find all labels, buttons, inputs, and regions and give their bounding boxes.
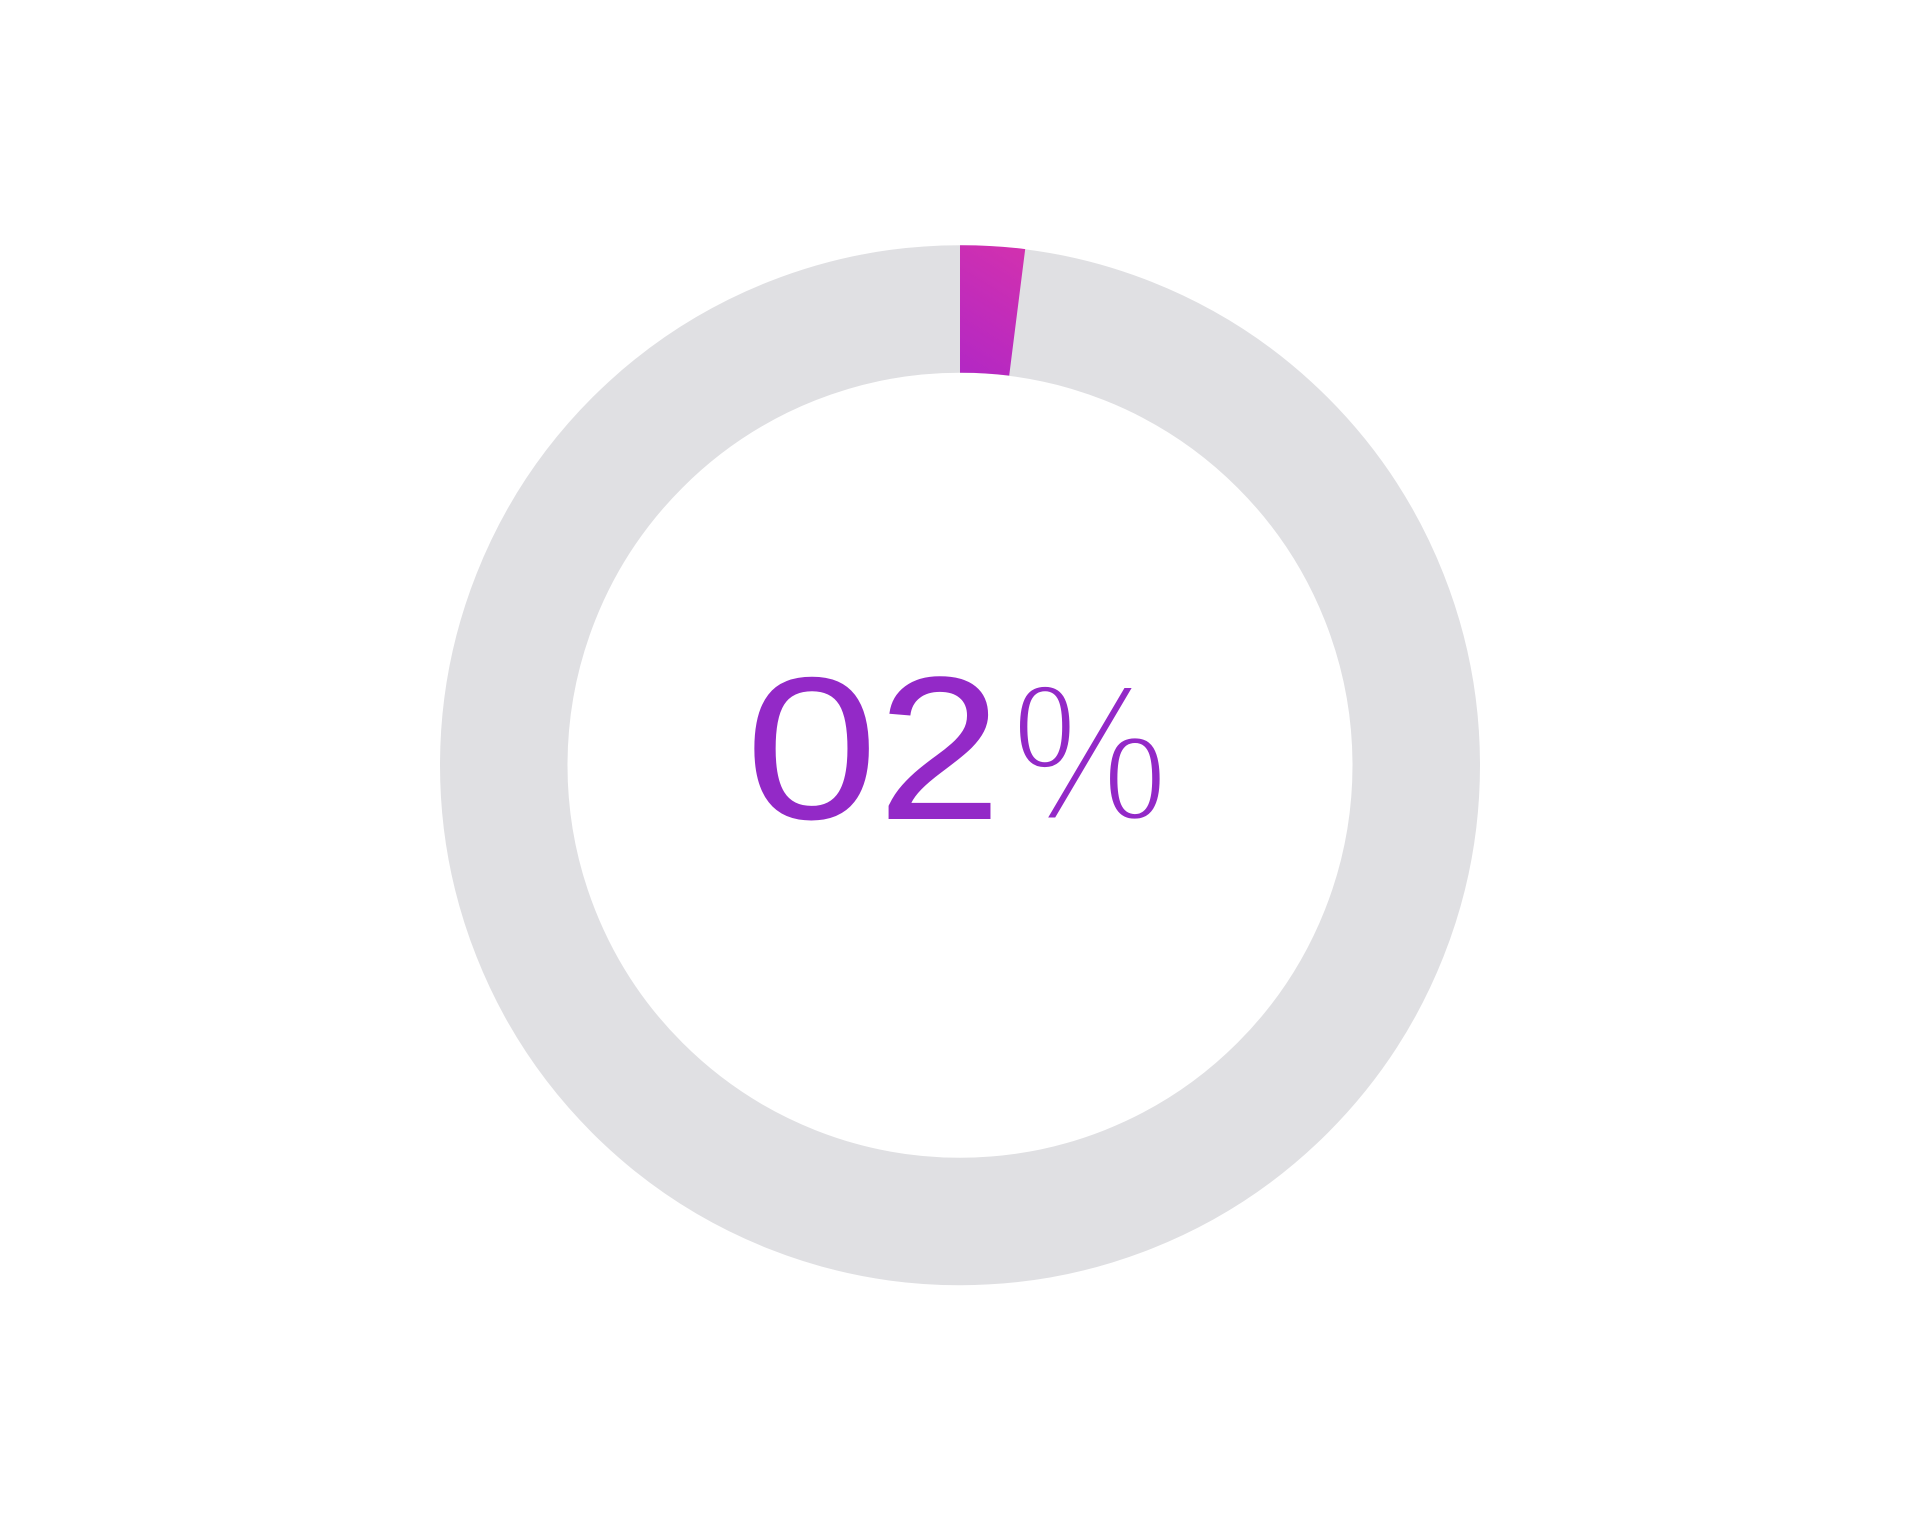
- digit 0: 0: [745, 636, 878, 862]
- center value: 02%: [745, 635, 1169, 863]
- percent sign: %: [1011, 642, 1169, 863]
- ring: remaining 98% track: [504, 309, 1416, 1222]
- digit 2: 2: [878, 635, 1001, 862]
- ring: highlighted 2% segment: [960, 245, 1025, 376]
